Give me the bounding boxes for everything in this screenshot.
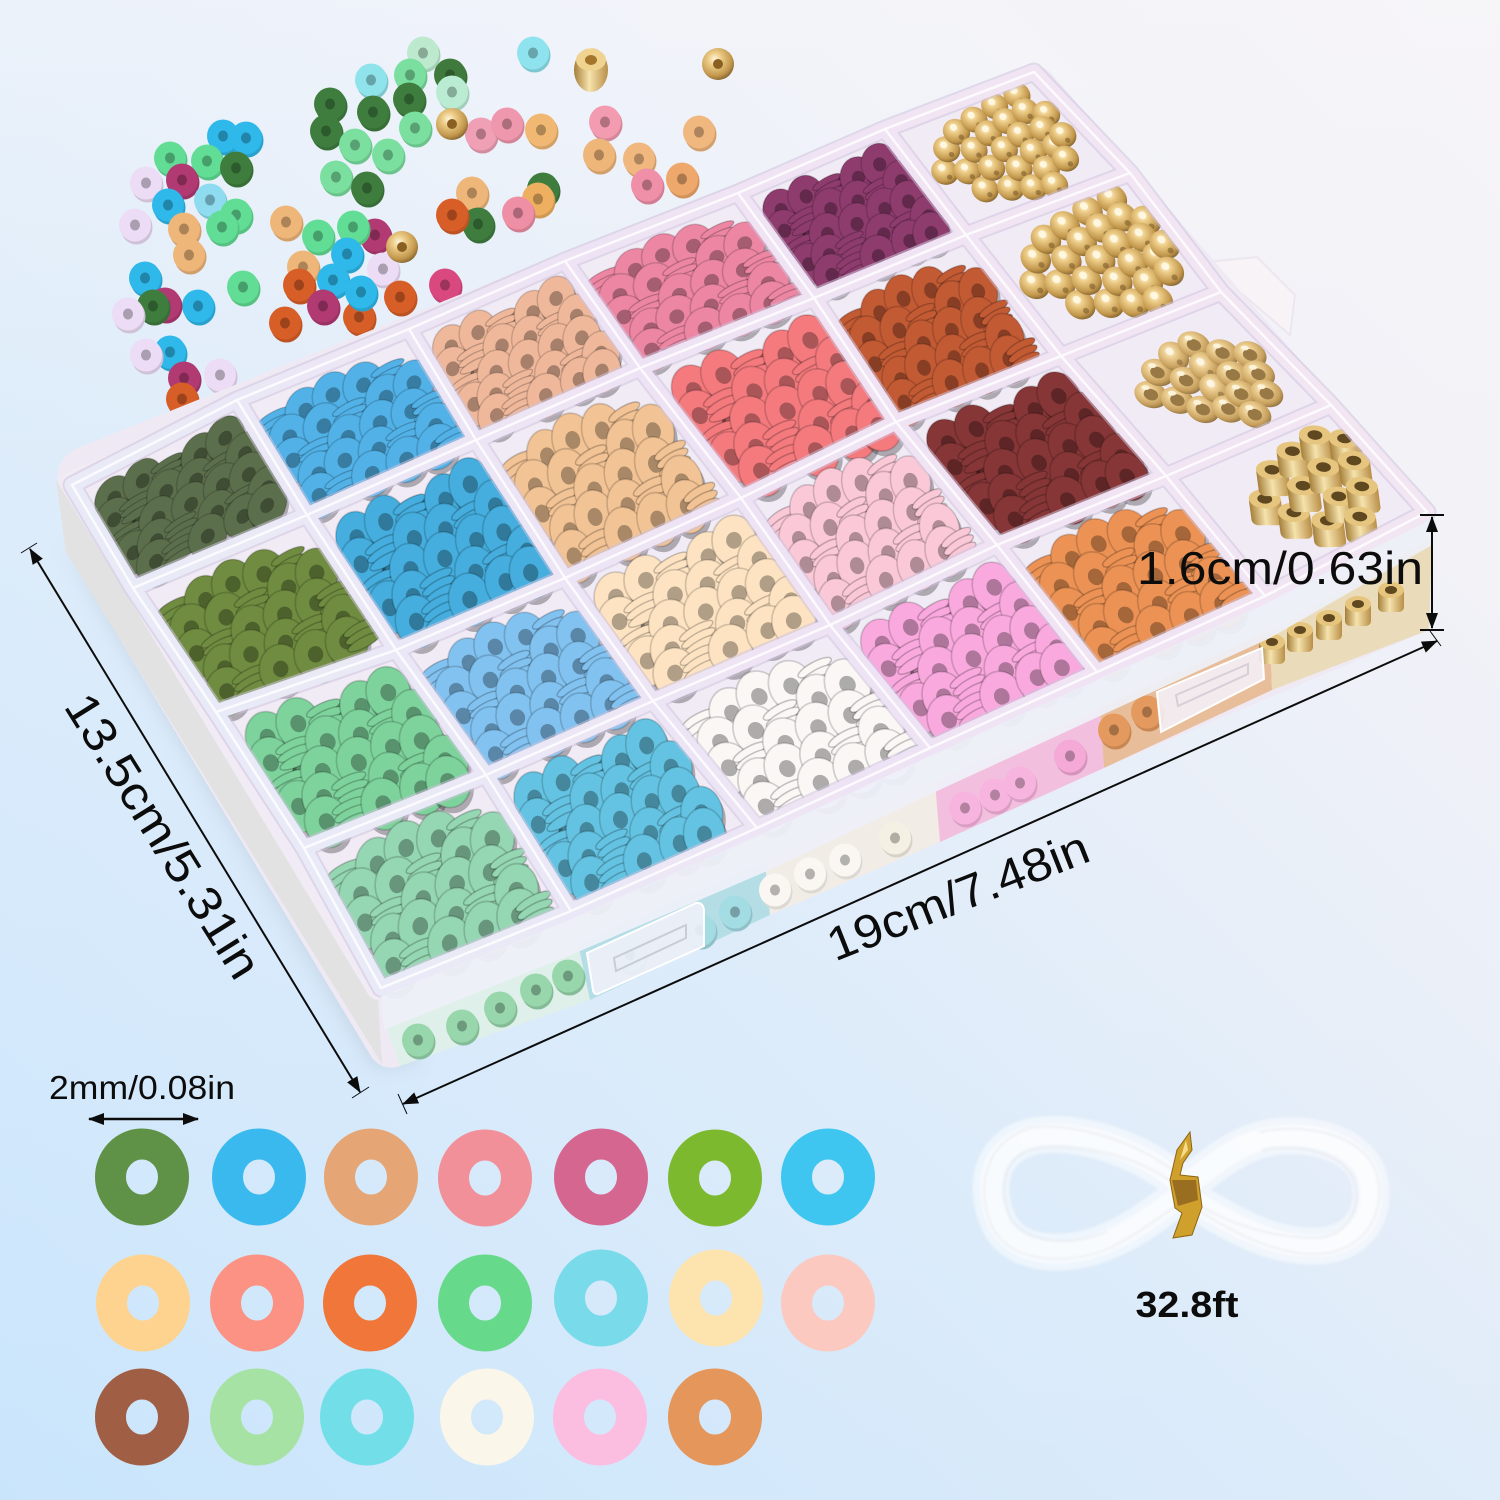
dimension: height 1.6cm: 1.6cm/0.63in (1137, 542, 1423, 594)
elastic cord coil (984, 1127, 1380, 1259)
compartment: coral (628, 296, 945, 524)
compartment: rose (550, 192, 834, 391)
compartment: light pink (728, 421, 1007, 652)
dimension: length 19cm: 19cm/7.48in (819, 820, 1096, 971)
box outer shell (57, 67, 1434, 1068)
left side wall (56, 480, 382, 1064)
scattered loose beads (112, 36, 734, 418)
dimension: length 19cm (398, 631, 1441, 1114)
icon: gold clip (1170, 1132, 1202, 1238)
compartment: mint (289, 775, 585, 1017)
arrow: 13.5cm (21, 543, 369, 1098)
cord length label: 32.8ft (1136, 1284, 1239, 1325)
tab: right side (1205, 257, 1295, 335)
colour swatches of clay discs (110, 1144, 860, 1450)
compartment: orchid pink (818, 542, 1126, 774)
compartment: sand (463, 368, 752, 606)
compartment: blue (295, 437, 593, 677)
compartment: cream (552, 495, 857, 727)
arrow: 1.6cm (1420, 515, 1444, 630)
compartment walls (72, 72, 1427, 988)
compartment: gold spacer beads (1097, 307, 1323, 464)
dimension: bead size 2mm: 2mm/0.08in (49, 1069, 235, 1106)
dimension: height 1.6cm (1137, 515, 1444, 630)
compartment: dark green (59, 396, 321, 611)
compartment: teal (474, 698, 765, 938)
compartment: gold tube beads (1203, 407, 1434, 579)
dimension: width 13.5cm: 13.5cm/5.31in (55, 683, 272, 988)
compartment: dark brown (884, 354, 1191, 570)
compartment: sky blue (222, 328, 499, 539)
latch: front right (1157, 648, 1264, 732)
compartment: olive (118, 514, 412, 738)
arrow: 19cm (398, 631, 1441, 1114)
compartment: green (203, 648, 513, 874)
compartment: gold round beads 2 (968, 170, 1229, 357)
box shadow (62, 540, 420, 1066)
front wall with beads visible (384, 538, 1432, 1066)
box lid surface (60, 72, 1434, 1000)
compartment: peach (397, 258, 655, 463)
compartment: white (639, 624, 960, 855)
bead storage box (56, 67, 1434, 1068)
compartment: rust (802, 235, 1069, 447)
compartment: plum (727, 126, 985, 320)
compartment: orange (983, 476, 1291, 698)
dimension: width 13.5cm (21, 543, 369, 1098)
compartment: gold round beads 1 (887, 69, 1119, 236)
compartment: pale blue (382, 577, 678, 801)
arrow: 2mm (89, 1118, 198, 1120)
lid rim (381, 518, 1432, 1030)
latch: front left (587, 903, 704, 994)
